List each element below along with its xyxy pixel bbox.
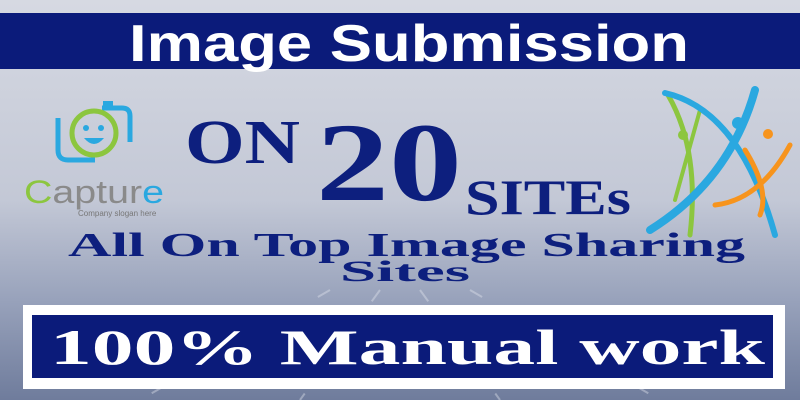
title: Image Submission (129, 15, 689, 73)
icon: camera smiley (58, 101, 130, 160)
icon: figures logo (650, 90, 790, 235)
bottom banner (23, 305, 785, 389)
heading: ON 20 SITEs: 20 (316, 101, 462, 225)
slogan: Company slogan here (78, 209, 157, 218)
subheading: All On Top Image Sharing (68, 227, 745, 264)
heading: ON 20 SITEs (185, 101, 631, 225)
subheading: Sites (340, 255, 470, 288)
title bar (0, 13, 800, 73)
logo: capture (24, 101, 164, 218)
heading: ON 20 SITEs: SITEs (465, 169, 631, 225)
heading: ON 20 SITEs: ON (185, 109, 300, 177)
subheading (68, 227, 745, 288)
banner text: 100% Manual work (50, 319, 765, 375)
text: Capture: Captur e (24, 174, 164, 210)
